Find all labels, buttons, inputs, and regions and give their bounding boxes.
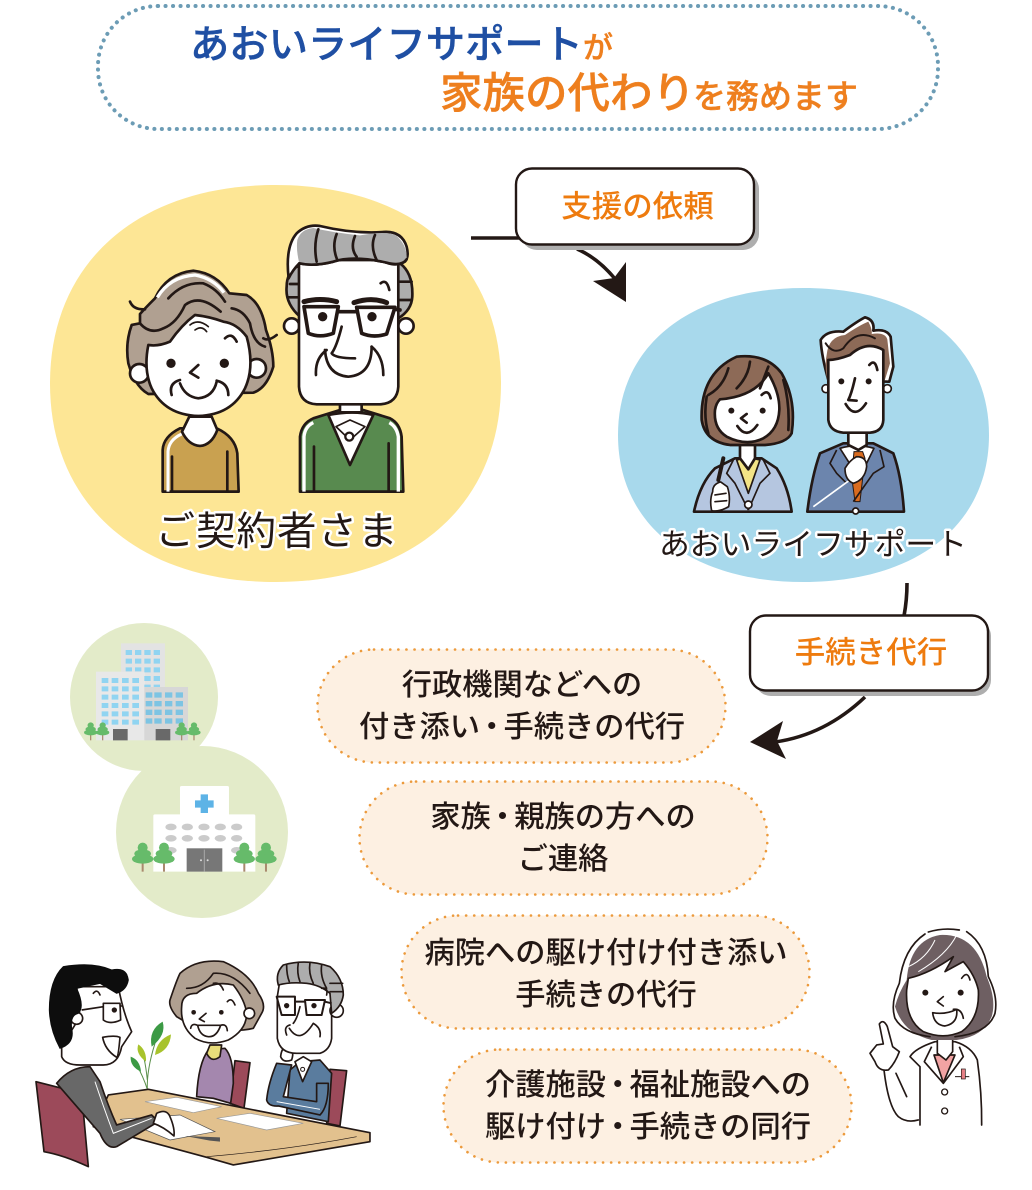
service pill: care facilities: 駆け付け・手続きの同行 (485, 1110, 811, 1144)
pink inner (934, 1055, 955, 1083)
label: client: ご契約者さま (156, 510, 398, 554)
service pill: family contact: ご連絡 (518, 842, 608, 876)
service pill: government offices: 付き添い・手続きの代行 (359, 710, 685, 744)
staff woman (694, 356, 793, 512)
icon: hospital (116, 746, 288, 918)
seated man (267, 962, 347, 1126)
arm with pointing hand (884, 1070, 918, 1121)
elderly woman (127, 271, 277, 492)
illustration: elderly couple (127, 226, 414, 492)
icon: office buildings (70, 623, 218, 771)
illustration: staff pair (694, 317, 904, 514)
callout: support request: 支援の依頼 (561, 190, 714, 224)
table (93, 1089, 370, 1165)
service pill: government offices: 行政機関などへの (402, 668, 642, 702)
service pill: family contact (360, 782, 768, 894)
plant (131, 1022, 171, 1089)
coat (910, 1042, 982, 1125)
panel: aoi life support circle (618, 288, 989, 582)
staff man (807, 317, 904, 514)
service pill: hospital: 病院への駆け付け付き添い (424, 936, 788, 970)
callout: procedure proxy (750, 616, 991, 696)
service pill: hospital (402, 916, 810, 1028)
seated woman (170, 961, 264, 1108)
service pill: government offices (318, 650, 726, 762)
arrow: procedures (750, 583, 907, 759)
title line 2: 家族の代わりを務めます (440, 71, 858, 118)
hair (895, 935, 993, 1040)
callout: support request (516, 168, 759, 250)
service pill: care facilities (444, 1050, 852, 1162)
title line 1: あおいライフサポートが (190, 23, 613, 67)
illustration: meeting at table (36, 961, 370, 1167)
illustration: pointing woman in white coat (870, 929, 996, 1125)
service pill: hospital: 手続きの代行 (515, 978, 697, 1012)
service pill: care facilities: 介護施設・福祉施設への (485, 1068, 811, 1102)
title box (98, 6, 938, 129)
service pill: family contact: 家族・親族の方への (430, 800, 696, 834)
arrow: request (471, 238, 626, 302)
elderly man (284, 226, 414, 492)
label: aoi life support: あおいライフサポート (659, 527, 967, 562)
panel: client circle (50, 185, 501, 582)
consultant (36, 965, 174, 1167)
windows (102, 650, 160, 725)
callout: procedure proxy: 手続き代行 (795, 636, 947, 670)
